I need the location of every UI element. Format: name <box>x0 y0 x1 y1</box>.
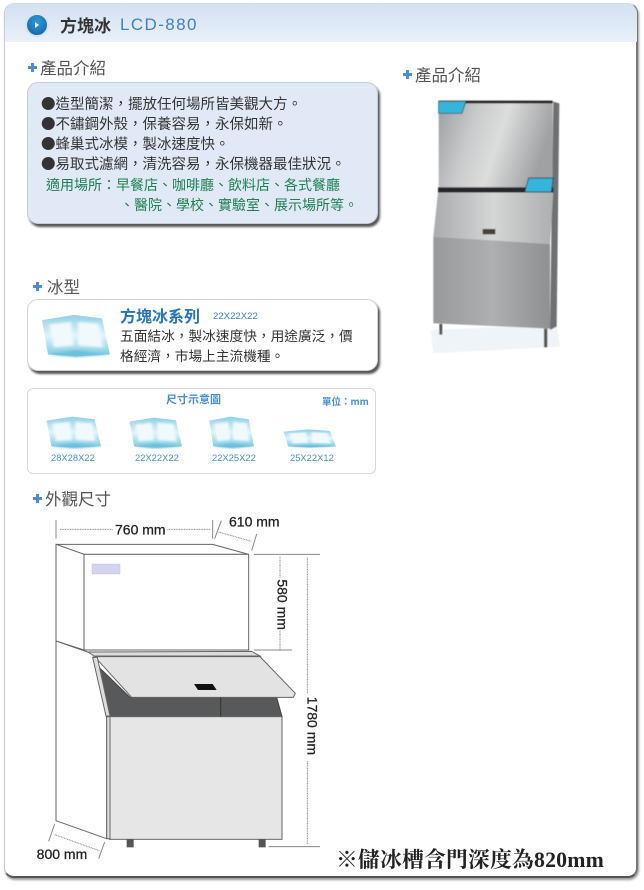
series title: 方塊冰系列 <box>120 303 200 327</box>
icon: ice cube <box>42 314 110 358</box>
suitable venues text <box>46 175 358 215</box>
dimension labels: 1780 mm <box>304 697 320 755</box>
dimension drawing <box>37 513 320 862</box>
size item 1: 28X28X22 <box>51 452 95 463</box>
panel: ice series <box>27 299 378 371</box>
size item 4: 25X22X12 <box>290 452 334 463</box>
footnote: ※儲冰槽含門深度為820mm <box>336 848 604 872</box>
icon: play button <box>25 13 49 37</box>
size item 2 <box>130 418 182 463</box>
feature list: ●造型簡潔，擺放任何場所皆美觀大方。 <box>41 93 302 114</box>
feature list: ●不鏽鋼外殼，保養容易，永保如新。 <box>41 113 288 134</box>
size item 2: 22X22X22 <box>135 452 179 463</box>
logo plate <box>92 564 120 574</box>
panel: product features <box>27 82 378 224</box>
dimension labels: 580 mm <box>274 579 290 630</box>
unit label: 單位：mm <box>322 394 369 408</box>
heading: product intro left: 產品介紹 <box>40 55 106 79</box>
suitable venues text: 、醫院、學校、實驗室、展示場所等。 <box>120 195 358 215</box>
dimension lines <box>49 520 320 859</box>
header bar <box>5 4 637 42</box>
dimension labels: 610 mm <box>229 513 280 529</box>
heading: ice type: 冰型 <box>47 274 80 298</box>
series description: 五面結冰，製冰速度快，用途廣泛，價 <box>120 325 353 345</box>
series description: 格經濟，市場上主流機種。 <box>120 345 284 365</box>
header model number: LCD-880 <box>120 15 198 34</box>
size item 4 <box>284 429 336 463</box>
size item 1 <box>46 416 101 463</box>
header title: 方塊冰 <box>60 12 111 37</box>
feature list: ●蜂巢式冰模，製冰速度快。 <box>41 133 230 154</box>
heading: product intro right: 產品介紹 <box>415 62 481 86</box>
series size: 22X22X22 <box>213 311 258 322</box>
series description <box>120 325 353 365</box>
dimension labels: 800 mm <box>37 846 87 862</box>
dimension labels: 760 mm <box>115 521 166 537</box>
machine feet <box>127 839 266 847</box>
size item 3: 22X25X22 <box>212 452 256 463</box>
machine outline <box>56 544 295 839</box>
door handle <box>194 684 217 690</box>
feature list <box>41 93 346 174</box>
panel: size diagrams <box>27 388 376 474</box>
size diagram title: 尺寸示意圖 <box>166 391 221 407</box>
dimension labels <box>37 513 320 862</box>
suitable venues text: 適用場所：早餐店、咖啡廳、飲料店、各式餐廳 <box>46 175 340 195</box>
feature list: ●易取式濾網，清洗容易，永保機器最佳狀況。 <box>41 153 346 174</box>
size item 3 <box>209 416 256 463</box>
heading: outer dimensions: 外觀尺寸 <box>45 486 111 510</box>
